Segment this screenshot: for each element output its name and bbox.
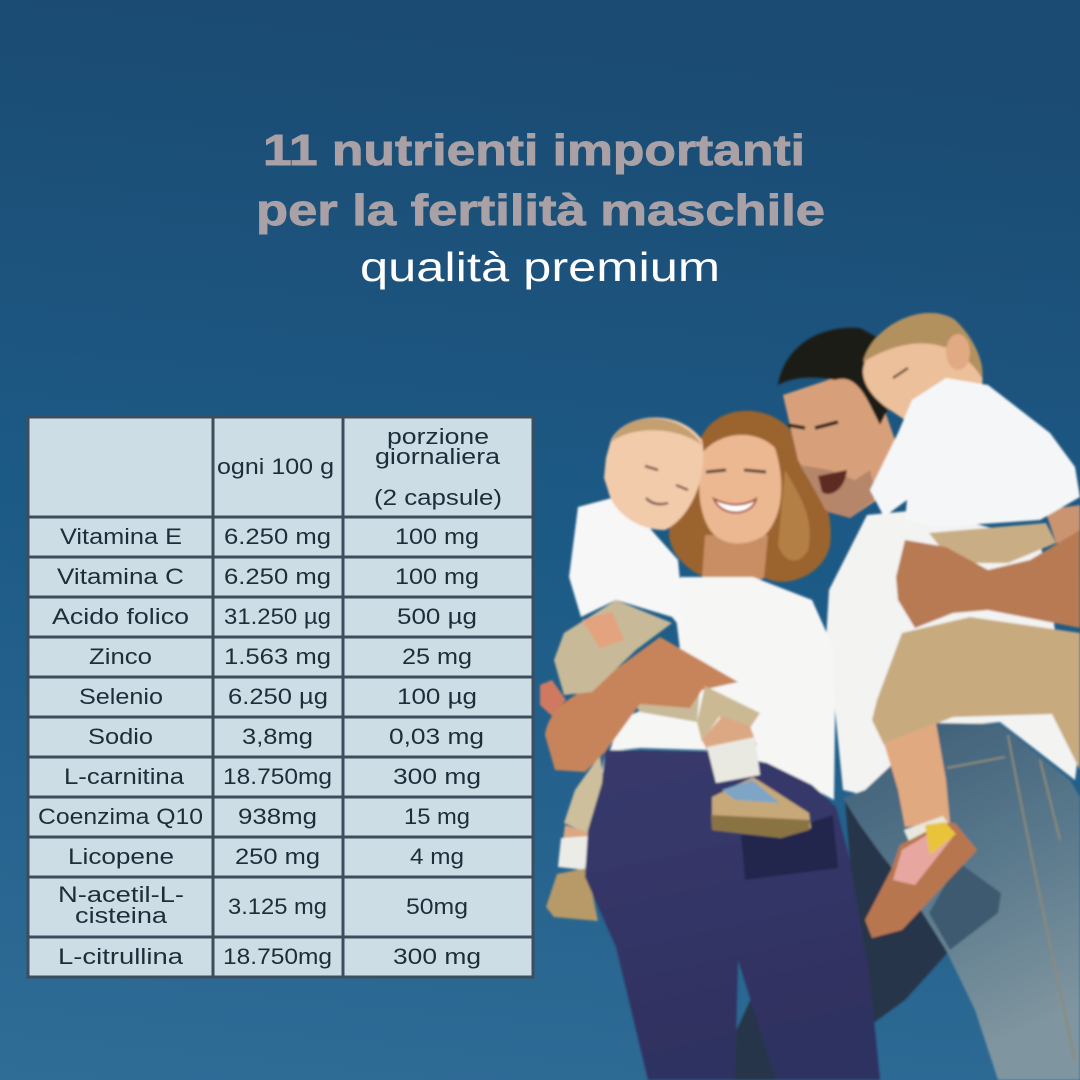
woman: face xyxy=(699,435,781,544)
woman: smile xyxy=(714,499,756,513)
man: head xyxy=(783,375,895,518)
row: Acido folico xyxy=(52,604,477,629)
baby two: shoe xyxy=(865,823,977,938)
row: Sodio: 0,03 mg xyxy=(389,724,484,749)
man: mouth xyxy=(818,470,847,494)
table header: ogni 100 g xyxy=(217,454,334,479)
baby one: near sock xyxy=(707,737,760,783)
row: Vitamina E xyxy=(60,524,479,549)
title xyxy=(256,126,825,235)
man: eye brows xyxy=(788,422,838,428)
baby two: leg xyxy=(884,723,950,827)
baby one: hand xyxy=(582,612,624,648)
row: L-carnitina: 18.750mg xyxy=(223,764,332,789)
row: N-acetil-L-cisteina: N-acetil-L- xyxy=(58,882,184,907)
table header xyxy=(217,424,502,510)
row: Sodio xyxy=(88,724,484,749)
man: shirt xyxy=(826,510,1080,795)
row: Vitamina E: 6.250 mg xyxy=(224,524,331,549)
subtitle: qualità premium xyxy=(360,244,720,290)
baby one: far sock xyxy=(558,836,590,870)
baby one: shoe blue panel xyxy=(722,780,780,803)
man: arm and hand xyxy=(896,530,1080,628)
row: Sodio: Sodio xyxy=(88,724,153,749)
row: N-acetil-L-cisteina: 3.125 mg xyxy=(228,894,327,919)
table header: porzione xyxy=(387,424,489,449)
row: Coenzima Q10: Coenzima Q10 xyxy=(38,804,203,829)
woman: neck xyxy=(702,535,768,586)
woman: arm and hand xyxy=(545,637,738,772)
row: Sodio: 3,8mg xyxy=(242,724,313,749)
baby one: shorts cuff xyxy=(697,686,760,742)
baby two: far arm xyxy=(1045,505,1080,545)
man: stubble xyxy=(800,465,877,518)
baby one: sweater xyxy=(569,495,685,633)
row: Coenzima Q10: 938mg xyxy=(238,804,317,829)
baby one: hair xyxy=(611,418,702,445)
baby one: leg near xyxy=(702,716,757,752)
row: Vitamina E: 100 mg xyxy=(395,524,479,549)
baby two: head xyxy=(863,313,983,420)
baby two: eye xyxy=(893,368,908,378)
row: Licopene xyxy=(68,844,464,869)
row: N-acetil-L-cisteina: 50mg xyxy=(406,894,468,919)
row: L-carnitina: L-carnitina xyxy=(64,764,185,789)
baby two: hair xyxy=(863,313,983,378)
row: L-citrullina xyxy=(58,944,481,969)
title: per la fertilità maschile xyxy=(256,186,825,235)
baby one: near shoe xyxy=(712,777,811,838)
family photo illustration xyxy=(540,313,1080,1080)
baby two: ear xyxy=(946,334,970,370)
man: dark trouser leg xyxy=(735,800,950,1080)
baby two: shorts top xyxy=(929,523,1056,563)
row: Zinco xyxy=(89,644,472,669)
woman: pants shadow xyxy=(741,815,838,880)
row: Selenio: 6.250 µg xyxy=(228,684,328,709)
row: Vitamina C: Vitamina C xyxy=(57,564,184,589)
row: Acido folico: Acido folico xyxy=(52,604,189,629)
row: L-citrullina: 300 mg xyxy=(393,944,481,969)
baby one: face details xyxy=(645,466,688,504)
row: Acido folico: 31.250 µg xyxy=(224,604,331,629)
row: Zinco: 1.563 mg xyxy=(224,644,331,669)
row: Selenio xyxy=(79,684,477,709)
man: jeans xyxy=(843,723,1080,1080)
row: Zinco: 25 mg xyxy=(402,644,472,669)
row: Vitamina E: Vitamina E xyxy=(60,524,182,549)
baby one: head xyxy=(604,417,703,530)
row: Zinco: Zinco xyxy=(89,644,152,669)
jeans shadow xyxy=(929,862,1001,950)
row: N-acetil-L-cisteina xyxy=(58,882,468,928)
row: L-citrullina: 18.750mg xyxy=(223,944,332,969)
row: Selenio: 100 µg xyxy=(397,684,477,709)
row: L-carnitina xyxy=(64,764,481,789)
baby one: shorts lower xyxy=(564,755,605,835)
row: Licopene: 250 mg xyxy=(235,844,320,869)
baby one: shorts xyxy=(554,600,672,695)
baby two: shorts lower xyxy=(872,617,1080,770)
baby one: leg far xyxy=(563,825,590,842)
table header: (2 capsule) xyxy=(374,485,502,510)
row: L-citrullina: L-citrullina xyxy=(58,944,184,969)
woman: hair xyxy=(669,411,831,582)
woman: eyes xyxy=(706,470,766,472)
row: Coenzima Q10: 15 mg xyxy=(404,804,470,829)
title: 11 nutrienti importanti xyxy=(263,126,805,175)
row: Licopene: 4 mg xyxy=(410,844,464,869)
jeans pocket seam xyxy=(947,735,1075,1060)
row: Licopene: Licopene xyxy=(68,844,174,869)
row: Vitamina C: 6.250 mg xyxy=(224,564,331,589)
baby two: sock xyxy=(904,816,950,848)
row: Coenzima Q10 xyxy=(38,804,470,829)
woman: hair highlight xyxy=(778,470,810,561)
row: Selenio: Selenio xyxy=(79,684,163,709)
nutrient table xyxy=(28,417,533,977)
woman: fingers behind xyxy=(540,680,566,716)
row: Acido folico: 500 µg xyxy=(397,604,477,629)
row: Vitamina C xyxy=(57,564,479,589)
man: hair xyxy=(778,328,890,425)
baby two: shoe insole xyxy=(893,826,952,885)
baby two: shoe yellow strap xyxy=(925,822,956,855)
baby one: shoe sole xyxy=(711,815,810,838)
woman: shirt xyxy=(601,577,835,800)
row: Vitamina C: 100 mg xyxy=(395,564,479,589)
table header: giornaliera xyxy=(375,444,501,469)
row: L-carnitina: 300 mg xyxy=(393,764,481,789)
woman: pants xyxy=(585,750,880,1080)
baby one: shorts back under arm xyxy=(628,685,700,722)
baby one: far shoe xyxy=(546,868,598,921)
baby two: sweater xyxy=(870,378,1080,527)
row: N-acetil-L-cisteina: cisteina xyxy=(75,903,168,928)
